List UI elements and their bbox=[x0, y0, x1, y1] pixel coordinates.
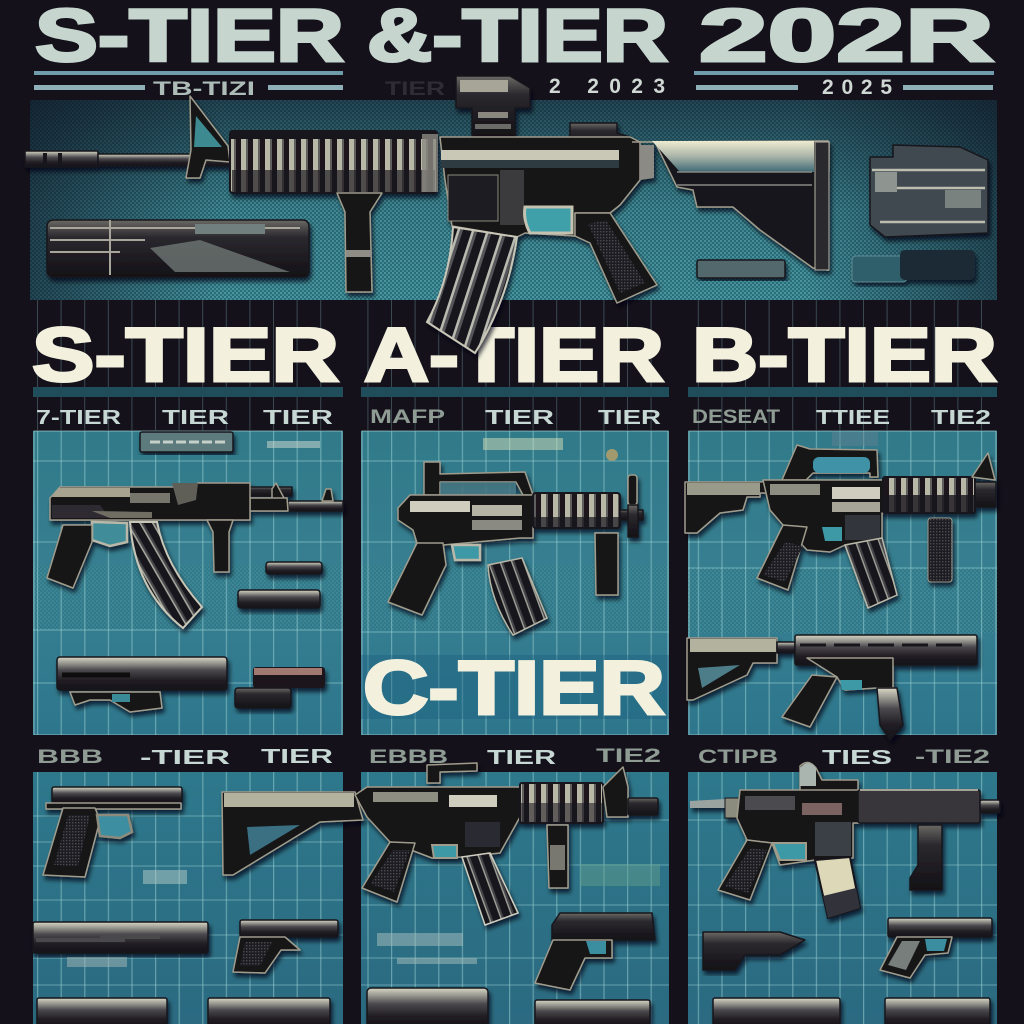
tier headings row: S-TIER bbox=[32, 313, 339, 398]
vertical foregrip bbox=[337, 193, 382, 292]
accessories: bottom-left row bbox=[37, 998, 330, 1024]
accessory: centre receiver bottom bbox=[367, 988, 488, 1024]
icon: B-tier SMG bbox=[687, 635, 977, 740]
accessory: S-tier cylinder parts bbox=[238, 562, 322, 608]
sub-labels row one: TIER bbox=[162, 407, 230, 429]
accessory: long receiver left bbox=[47, 220, 309, 277]
icon: A-tier small screw bbox=[606, 449, 618, 461]
icon: centre assault rifle bbox=[222, 763, 658, 925]
panel: A-tier grid bbox=[361, 431, 669, 735]
sub-labels row one: TIER bbox=[598, 407, 662, 429]
sub-labels row one: TIER bbox=[263, 407, 334, 429]
sub-labels row one: DESEAT bbox=[692, 407, 780, 428]
tag: S-tier faded part bbox=[267, 441, 320, 448]
sub-labels row one: TIE2 bbox=[931, 407, 991, 429]
tag: centre panel faded labels bbox=[377, 933, 477, 964]
panel: hero background bbox=[30, 100, 997, 300]
sub-labels row one bbox=[36, 407, 991, 429]
tier headings row: A-TIER bbox=[364, 313, 664, 398]
icon: centre pistol bbox=[535, 913, 655, 990]
tag: B-tier part bbox=[832, 432, 878, 446]
pistol grip bbox=[575, 213, 657, 303]
front sight bbox=[186, 96, 230, 178]
subtitle rules and years: 2025 bbox=[822, 76, 892, 99]
sub-labels row two: BBB bbox=[37, 747, 103, 768]
sub-labels row two: CTIPB bbox=[698, 747, 778, 768]
accessory: centre bottom part bbox=[535, 1000, 650, 1024]
icon: bottom-left small pistol bbox=[233, 920, 338, 973]
accessories: right bottom row bbox=[713, 998, 990, 1024]
accessory: right receiver part bbox=[703, 932, 805, 970]
tag: A-tier part bbox=[483, 438, 563, 450]
icon: right pistol bbox=[880, 918, 992, 978]
subtitle rules and years: TIER bbox=[385, 79, 445, 100]
panel: bottom-right grid bbox=[688, 772, 997, 1024]
accessory: S-tier lower receiver bbox=[57, 657, 227, 712]
icon: B-tier carbine bbox=[685, 445, 996, 608]
icon: bottom-left pistol bbox=[43, 787, 182, 877]
icon: right assault rifle bbox=[690, 762, 1000, 918]
sub-labels row two: TIER bbox=[487, 747, 557, 769]
panel: S-tier grid bbox=[33, 431, 343, 735]
main title bbox=[35, 0, 994, 77]
accessory: receiver block right bbox=[870, 145, 988, 237]
sub-labels row two: TIER bbox=[261, 746, 334, 768]
upper receiver bbox=[440, 137, 640, 237]
stock bbox=[632, 141, 829, 270]
tag: bottom-left under slide bbox=[67, 957, 127, 967]
optic bbox=[456, 76, 530, 137]
sub-labels row one: MAFP bbox=[370, 407, 445, 428]
sub-labels row two: -TIE2 bbox=[915, 747, 990, 768]
icon: A-tier carbine bbox=[388, 462, 643, 635]
dark band behind sub-labels row two bbox=[33, 735, 997, 772]
sub-labels row two: -TIER bbox=[140, 747, 231, 769]
accessory: bottom-left long slide bbox=[33, 922, 208, 953]
sub-labels row two: EBBB bbox=[369, 747, 448, 768]
icon: S-tier AK rifle bbox=[47, 483, 343, 628]
rear sight bbox=[570, 123, 630, 148]
sub-labels row two: TIE2 bbox=[596, 746, 661, 767]
handguard bbox=[230, 131, 438, 193]
tag: S-tier top part bbox=[140, 432, 233, 452]
subtitle rules and years: TB-TIZI bbox=[153, 79, 255, 100]
trigger guard bbox=[525, 207, 572, 233]
icon: hero assault rifle bbox=[25, 76, 829, 303]
accessory: faded part bbox=[852, 250, 975, 282]
panel: bottom-left grid bbox=[33, 772, 343, 1024]
sub-labels row one: TTIEE bbox=[816, 407, 890, 429]
sub-labels row two: TIES bbox=[822, 747, 892, 769]
sub-labels row one: TIER bbox=[485, 407, 555, 429]
sub-labels row one: 7-TIER bbox=[36, 407, 122, 429]
tag: bottom-left faded bbox=[143, 870, 187, 884]
C-tier heading: C-TIER bbox=[363, 646, 665, 731]
accessory: S-tier slide parts bbox=[235, 667, 325, 708]
subtitle rules and years: 2 2023 bbox=[549, 75, 665, 98]
sub-labels row two bbox=[37, 746, 990, 769]
tier headings row: B-TIER bbox=[692, 313, 997, 398]
dark grid strip between hero and tier headings bbox=[33, 300, 997, 430]
tier headings row bbox=[32, 313, 997, 398]
panel: B-tier grid bbox=[688, 431, 997, 735]
subtitle rules and years bbox=[34, 71, 994, 100]
accessory: small bolt bbox=[697, 260, 785, 278]
panel: bottom-centre grid bbox=[361, 772, 669, 1024]
barrel and muzzle bbox=[25, 151, 233, 167]
icon: hero magazine bbox=[427, 227, 517, 353]
tag: centre green plate bbox=[580, 864, 660, 886]
